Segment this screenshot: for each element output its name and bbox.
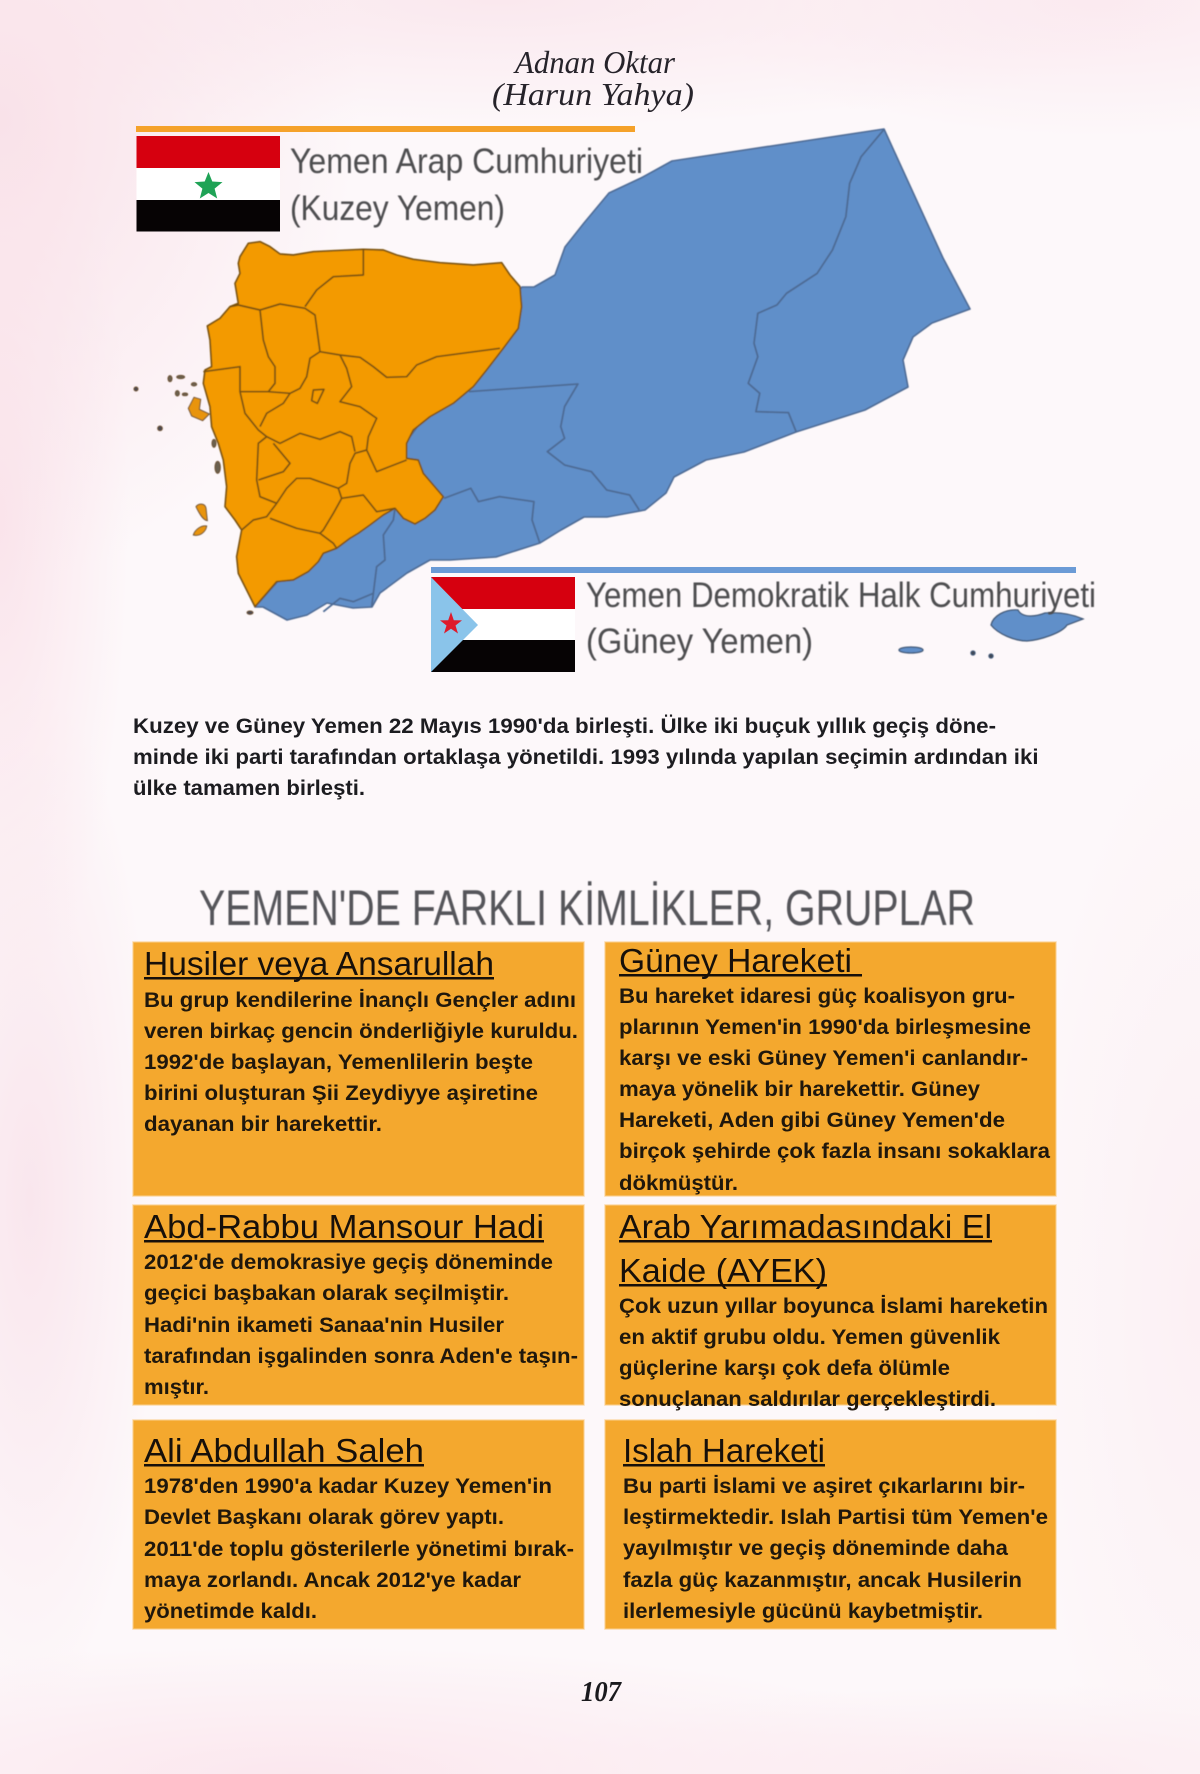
card text: en aktif grubu oldu. Yemen güvenlik [619,1326,1000,1349]
card text [623,1475,1048,1623]
card text: Hadi'nin ikameti Sanaa'nin Husiler [144,1314,504,1337]
card text: 1992'de başlayan, Yemenlilerin beşte [144,1051,533,1074]
panel: Husiler veya Ansarullah [133,942,584,1196]
card text: Devlet Başkanı olarak görev yaptı. [144,1506,504,1529]
card title: Islah Hareketi [623,1432,825,1469]
card text [144,1475,574,1623]
panel: Abd-Rabbu Mansour Hadi [133,1205,584,1405]
author header: Adnan Oktar [513,44,676,80]
card text: yönetimde kaldı. [144,1600,317,1623]
label: South Yemen [586,576,1096,661]
intro paragraph: Kuzey ve Güney Yemen 22 Mayıs 1990'da birleşti. Ülke iki buçuk yıllık geçiş döne- [133,715,996,738]
card text: birçok şehirde çok fazla insanı sokaklara [619,1140,1050,1163]
intro paragraph [133,715,1038,800]
panel: Güney Hareketi [605,942,1056,1196]
south legend bar [431,567,1076,573]
card text: 2012'de demokrasiye geçiş döneminde [144,1251,553,1274]
card title: Arab Yarımadasındaki El [619,1208,992,1245]
intro paragraph: ülke tamamen birleşti. [133,777,365,800]
card text: Bu hareket idaresi güç koalisyon gru- [619,985,1015,1008]
label: North Yemen [290,142,643,228]
card text: sonuçlanan saldırılar gerçekleştirdi. [619,1388,996,1411]
card text: maya zorlandı. Ancak 2012'ye kadar [144,1569,521,1592]
card text: Bu grup kendilerine İnançlı Gençler adını [144,989,576,1012]
card text: birini oluşturan Şii Zeydiyye aşiretine [144,1082,538,1105]
card text [619,985,1050,1195]
panel: Ali Abdullah Saleh [133,1420,584,1629]
card title [619,1208,992,1289]
page number: 107 [581,1677,622,1708]
label: South Yemen: Yemen Demokratik Halk Cumhuriyeti [586,576,1096,615]
card text: 2011'de toplu gösterilerle yönetimi bırak- [144,1538,574,1561]
section heading: YEMEN'DE FARKLI KİMLİKLER, GRUPLAR [199,880,975,936]
card text: Çok uzun yıllar boyunca İslami hareketin [619,1295,1048,1318]
card text: mıştır. [144,1376,209,1399]
card text: ilerlemesiyle gücünü kaybetmiştir. [623,1600,983,1623]
card text: yayılmıştır ve geçiş döneminde daha [623,1537,1008,1560]
label: North Yemen: (Kuzey Yemen) [290,189,505,228]
card title: Husiler veya Ansarullah [144,945,494,982]
card text: geçici başbakan olarak seçilmiştir. [144,1282,509,1305]
card title: Kaide (AYEK) [619,1252,827,1289]
card text: dökmüştür. [619,1172,738,1195]
flag: South Yemen [431,577,575,672]
card text [144,1251,578,1399]
panel: Arab Yarımadasındaki El Kaide (AYEK) [605,1205,1056,1411]
card text: plarının Yemen'in 1990'da birleşmesine [619,1016,1031,1039]
card text: veren birkaç gencin önderliğiyle kuruldu. [144,1020,578,1043]
card title: Abd-Rabbu Mansour Hadi [144,1208,544,1245]
red sea islands [134,375,253,614]
card title: Ali Abdullah Saleh [144,1432,424,1469]
intro paragraph: minde iki parti tarafından ortaklaşa yönetildi. 1993 yılında yapılan seçimin ardından iki [133,746,1038,769]
card text: karşı ve eski Güney Yemen'i canlandır- [619,1047,1028,1070]
author header: (Harun Yahya) [492,76,694,112]
north Yemen region [203,242,522,607]
panel: Islah Hareketi [605,1420,1056,1629]
card text: 1978'den 1990'a kadar Kuzey Yemen'in [144,1475,552,1498]
card text: fazla güç kazanmıştır, ancak Husilerin [623,1569,1022,1592]
label: South Yemen: (Güney Yemen) [586,622,813,661]
card text: Hareketi, Aden gibi Güney Yemen'de [619,1109,1005,1132]
Socotra and nearby islands [899,610,1083,658]
card text: güçlerine karşı çok defa ölümle [619,1357,950,1380]
label: North Yemen: Yemen Arap Cumhuriyeti [290,142,643,181]
flag: North Yemen [136,136,280,232]
card text [144,989,578,1136]
map of Yemen [134,129,1083,658]
card title: Güney Hareketi [619,942,852,979]
card text [619,1295,1048,1411]
card text: dayanan bir harekettir. [144,1113,382,1136]
author header [492,44,694,112]
card text: tarafından işgalinden sonra Aden'e taşın- [144,1345,578,1368]
north legend bar [136,126,635,132]
card text: Bu parti İslami ve aşiret çıkarlarını bir- [623,1475,1025,1498]
card text: maya yönelik bir harekettir. Güney [619,1078,980,1101]
card text: leştirmektedir. Islah Partisi tüm Yemen'e [623,1506,1048,1529]
south Yemen region [255,129,970,620]
